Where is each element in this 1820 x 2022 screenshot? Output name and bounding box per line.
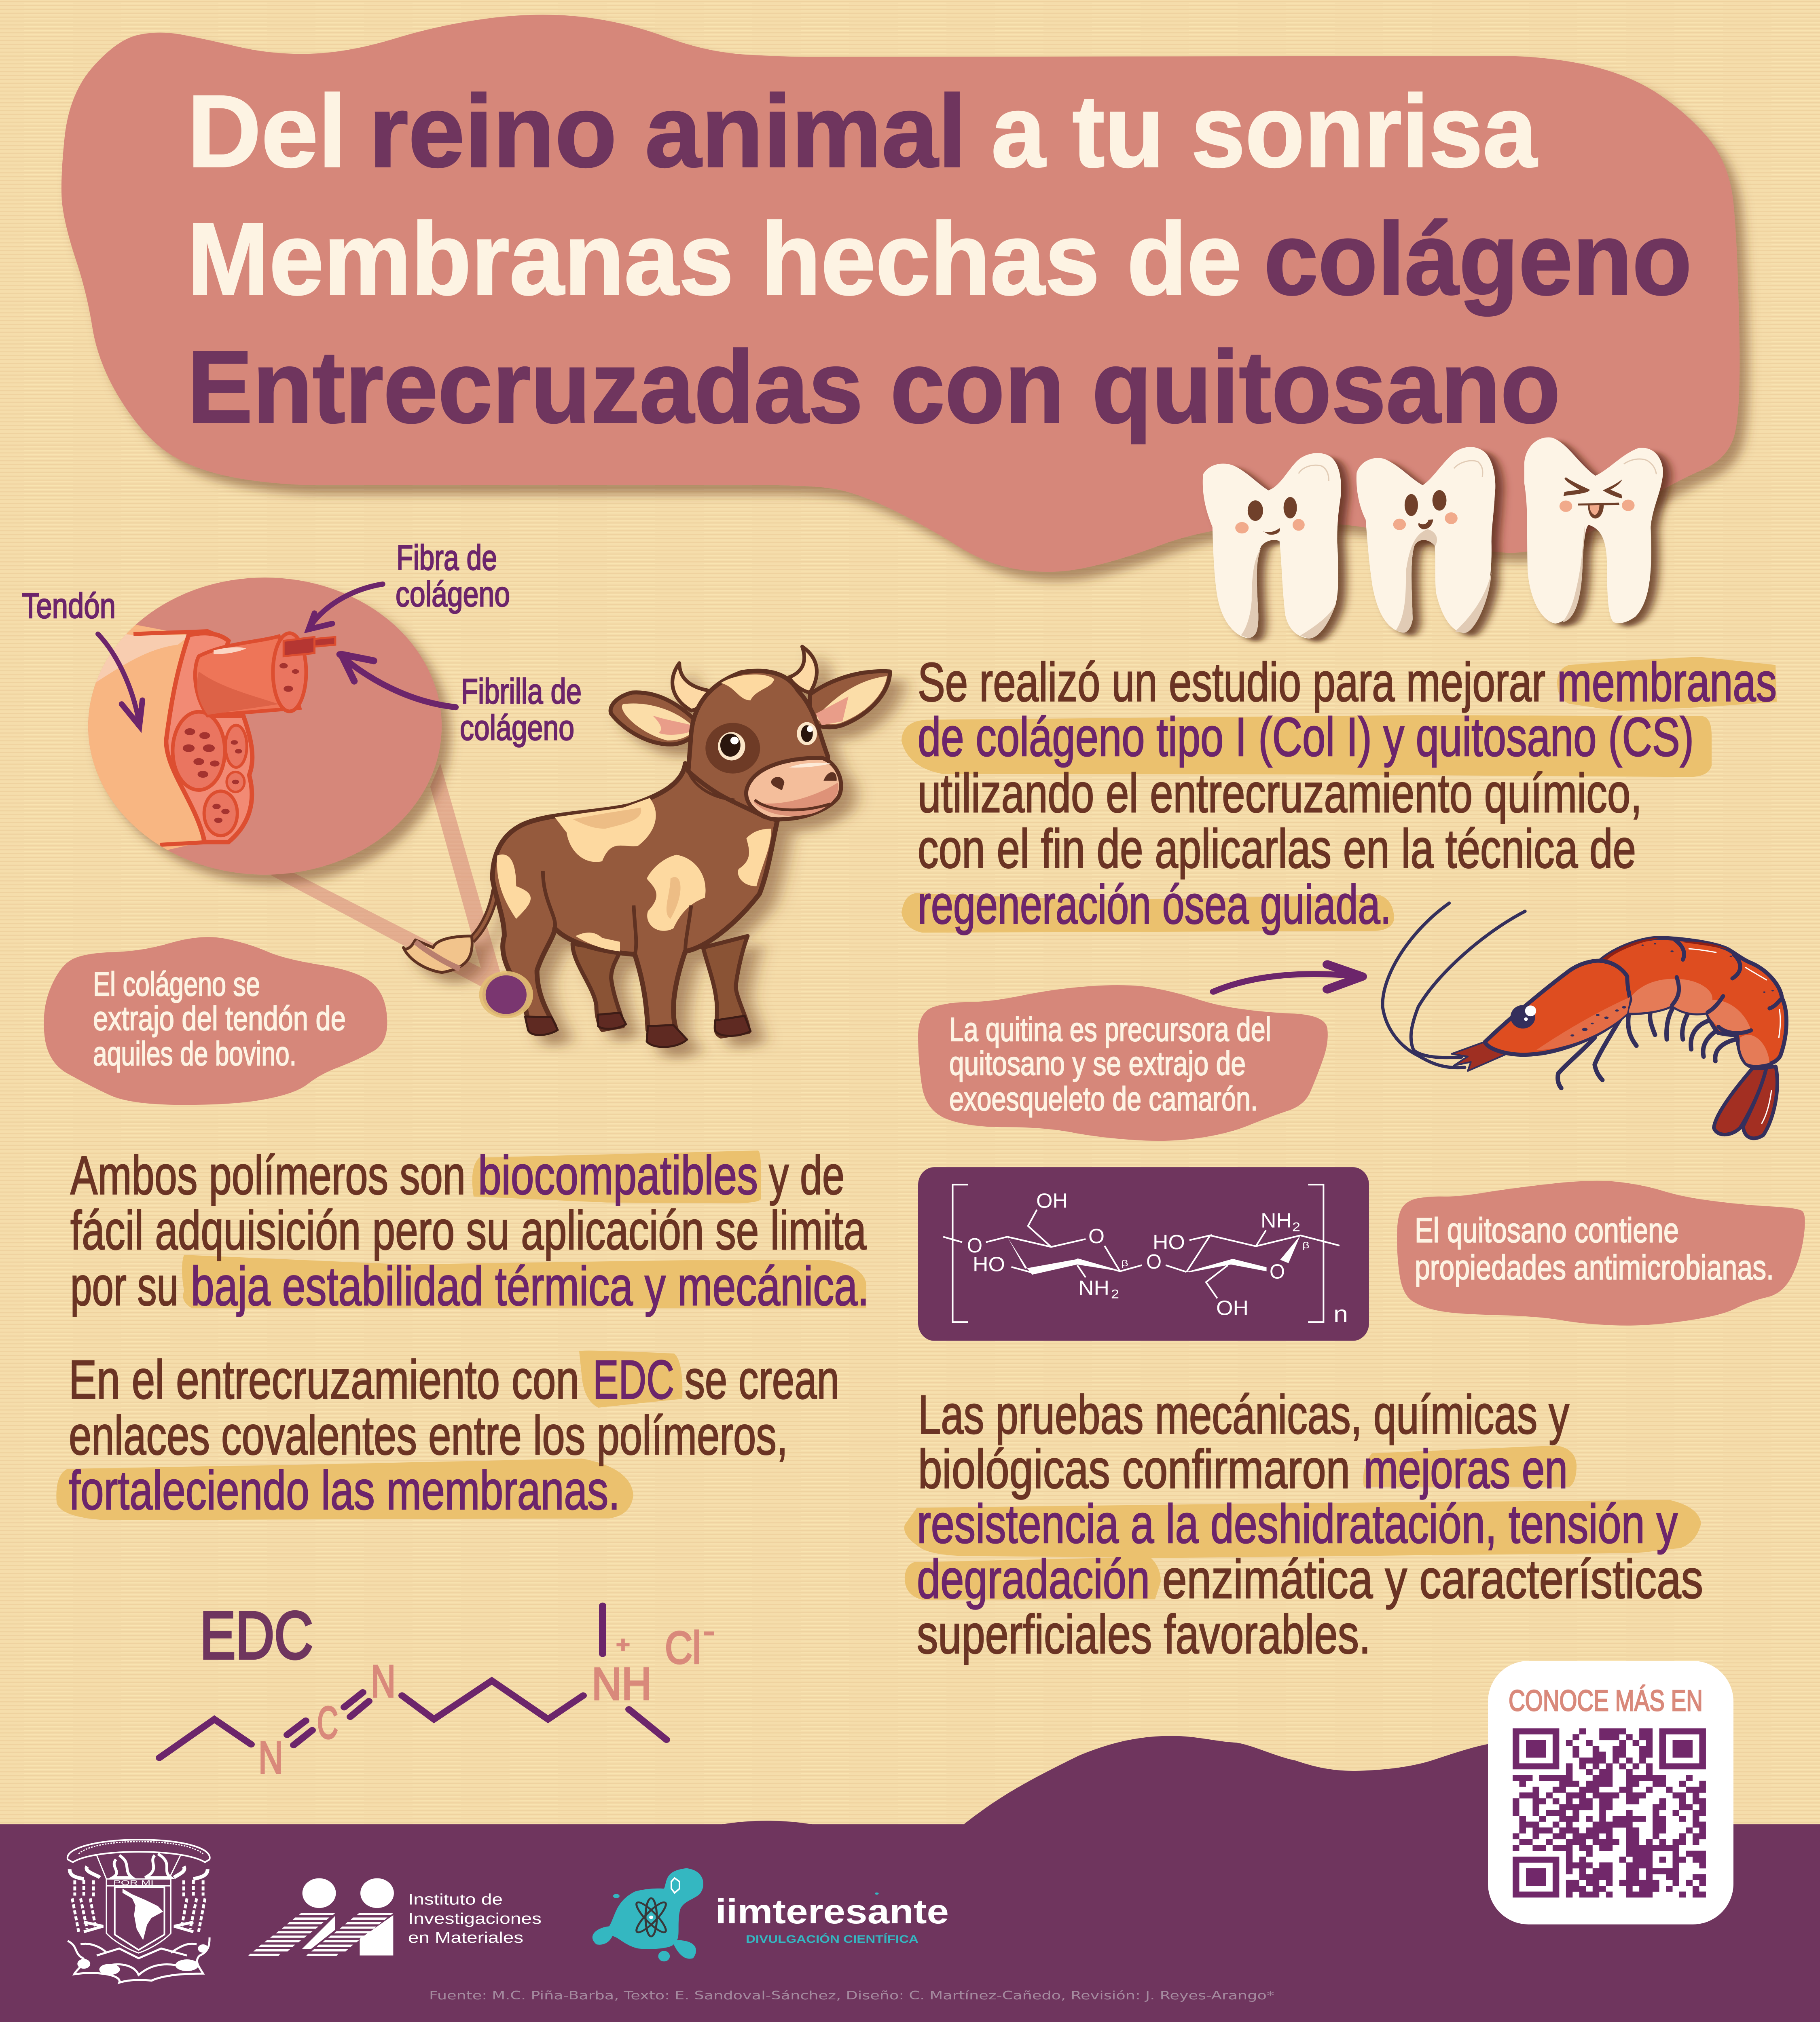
beam to ankle	[270, 764, 503, 988]
text block: EDC crosslinking	[56, 1349, 839, 1521]
illustration: cow	[404, 647, 890, 1047]
callout: collagen source: aquiles de bovino.	[93, 1035, 296, 1073]
atoms: N	[371, 1656, 396, 1707]
chitosan labels: O	[1146, 1250, 1162, 1273]
text block: EDC crosslinking: enlaces covalentes entre los polímeros,	[69, 1404, 788, 1466]
bonds	[159, 1606, 667, 1758]
marker: achilles tendon spot	[483, 973, 530, 1016]
seal text: POR MI	[113, 1879, 154, 1887]
far legs	[573, 944, 623, 1030]
atoms	[258, 1616, 715, 1783]
text block: EDC crosslinking: EDC	[593, 1349, 674, 1410]
panel: chitosan structure	[918, 1167, 1369, 1341]
chitosan labels: β	[1302, 1241, 1310, 1250]
chitosan labels: 2	[1292, 1220, 1300, 1234]
tendon cross section	[166, 633, 335, 842]
hexagon	[671, 1878, 679, 1893]
chitosan labels: NH	[1261, 1209, 1292, 1232]
text: Instituto de Investigaciones en Materiales	[408, 1891, 542, 1946]
callout: antimicrobial	[1397, 1181, 1805, 1326]
title: Del	[187, 74, 347, 188]
illustration: tendon magnifier circle	[59, 577, 503, 988]
chitosan labels: OH	[1216, 1297, 1249, 1320]
atoms: C	[317, 1698, 338, 1748]
chitosan labels: O	[967, 1234, 982, 1257]
text block: polymers: biocompatibles	[478, 1144, 758, 1206]
arrow: tendon	[98, 634, 142, 726]
tooth 2	[1357, 447, 1495, 633]
text: Instituto de Investigaciones en Materiales: Investigaciones	[408, 1910, 542, 1927]
text block: EDC crosslinking: se crean	[685, 1349, 839, 1410]
chart: EDC molecule: EDC	[200, 1597, 313, 1673]
eye	[1511, 1005, 1535, 1028]
tail	[472, 890, 495, 940]
atoms: N	[258, 1732, 283, 1783]
body	[493, 764, 777, 1030]
text block: polymers	[70, 1144, 869, 1317]
icon: UNAM seal	[68, 1840, 210, 1983]
text block: study aim: regeneración ósea guiada.	[918, 874, 1391, 935]
text block: polymers: Ambos polímeros son	[70, 1144, 466, 1206]
abdomen	[1601, 938, 1786, 1066]
text block: results: mejoras en	[1364, 1438, 1568, 1500]
text block: polymers: y de	[769, 1144, 844, 1206]
panel: title blob	[61, 15, 1740, 572]
chitosan labels: 2	[1111, 1287, 1119, 1301]
chitosan labels: HO	[1153, 1231, 1185, 1254]
text: Instituto de Investigaciones en Materiales: Instituto de	[408, 1891, 503, 1908]
leg outlines and hooves	[543, 871, 691, 954]
panel: QR card: CONOCE MÁS EN	[1509, 1684, 1703, 1717]
illustration: shrimp	[1382, 903, 1786, 1138]
icon: three cartoon teeth	[1203, 437, 1663, 639]
horns	[673, 663, 709, 711]
spots	[497, 798, 771, 952]
arrow: collagen fiber	[309, 584, 383, 629]
title: a tu sonrisa	[991, 74, 1538, 188]
logo: iimteresante	[593, 1868, 949, 1961]
atoms: Cl	[665, 1623, 701, 1673]
chitosan labels	[967, 1189, 1348, 1327]
label: Tendón: Tendón	[22, 586, 116, 626]
segment lines	[1601, 940, 1780, 1033]
chitosan labels: OH	[1036, 1189, 1068, 1212]
logo: IIM	[248, 1878, 394, 1956]
text block: results: degradación	[917, 1548, 1150, 1610]
arrow: to shrimp	[1213, 964, 1362, 992]
title: Entrecruzadas con quitosano	[187, 329, 1560, 445]
text block: EDC crosslinking: fortaleciendo las membranas.	[69, 1459, 620, 1521]
panel: footer band	[0, 1736, 1820, 2022]
atoms: -	[703, 1616, 715, 1647]
title: colágeno	[1264, 201, 1692, 317]
rostrum	[1452, 1042, 1505, 1071]
text block: study aim	[902, 651, 1777, 935]
text block: results	[904, 1384, 1703, 1665]
atoms: NH	[592, 1659, 652, 1709]
panel: QR card	[1488, 1661, 1733, 1925]
label: Fibra de colágeno	[396, 538, 510, 614]
chitosan labels: n	[1333, 1301, 1348, 1327]
carapace	[1485, 961, 1630, 1055]
ears	[611, 692, 700, 745]
callout: collagen source: El colágeno se	[93, 965, 260, 1003]
title: reino animal	[369, 74, 966, 188]
chitosan bonds	[943, 1184, 1340, 1322]
callout: collagen source	[44, 937, 387, 1105]
atoms: +	[616, 1633, 630, 1656]
chitosan labels: O	[1270, 1260, 1285, 1283]
text block: polymers: fácil adquisición pero su aplicación se limita	[70, 1199, 866, 1261]
legs	[1558, 1007, 1735, 1088]
callout: chitin source: La quitina es precursora del	[949, 1011, 1271, 1048]
credits: Fuente: M.C. Piña-Barba, Texto: E. Sandoval-Sánchez, Diseño: C. Martínez-Cañedo, Revisión: J. Reyes-Arango*	[429, 1989, 1274, 2002]
text block: EDC crosslinking: En el entrecruzamiento con	[69, 1349, 579, 1410]
speckles	[1570, 943, 1774, 1036]
text block: results: superficiales favorables.	[917, 1603, 1371, 1665]
chitosan labels: O	[1088, 1225, 1105, 1248]
tooth 1	[1203, 453, 1341, 639]
text block: polymers: por su	[70, 1255, 178, 1317]
title	[187, 74, 1692, 445]
label: Fibrilla de colágeno: colágeno	[460, 708, 574, 747]
logo: iimteresante: DIVULGACIÓN CIENTÍFICA	[746, 1933, 918, 1946]
tooth 3	[1524, 437, 1663, 624]
callout: chitin source	[918, 985, 1328, 1141]
chitosan labels: β	[1121, 1258, 1128, 1268]
QR code	[1513, 1731, 1706, 1895]
text block: results: biológicas confirmaron	[918, 1438, 1350, 1500]
head	[688, 671, 828, 817]
label: Fibrilla de colágeno	[460, 671, 582, 747]
label: Fibra de colágeno: Fibra de	[396, 538, 497, 577]
chitosan labels: HO	[973, 1253, 1005, 1275]
chitosan labels: NH	[1078, 1276, 1109, 1299]
atom	[633, 1898, 669, 1936]
chart: EDC molecule	[159, 1597, 715, 1783]
label: Fibrilla de colágeno: Fibrilla de	[461, 671, 582, 711]
title: Membranas hechas de	[187, 201, 1242, 316]
callout: antimicrobial: El quitosano contiene	[1415, 1211, 1679, 1250]
snout	[746, 758, 841, 819]
label: Fibra de colágeno: colágeno	[396, 574, 510, 614]
text: Instituto de Investigaciones en Materiales: en Materiales	[408, 1929, 523, 1946]
callout: collagen source: extrajo del tendón de	[93, 999, 346, 1037]
antennae	[1382, 903, 1525, 1068]
text block: polymers: baja estabilidad térmica y mecánica.	[191, 1255, 869, 1317]
tail fins	[1714, 1068, 1767, 1135]
callout: chitin source: quitosano y se extrajo de	[949, 1045, 1246, 1082]
logo: iimteresante: iimteresante	[715, 1892, 949, 1931]
callout: chitin source: exoesqueleto de camarón.	[949, 1080, 1258, 1117]
arrow: collagen fibril	[339, 654, 456, 707]
